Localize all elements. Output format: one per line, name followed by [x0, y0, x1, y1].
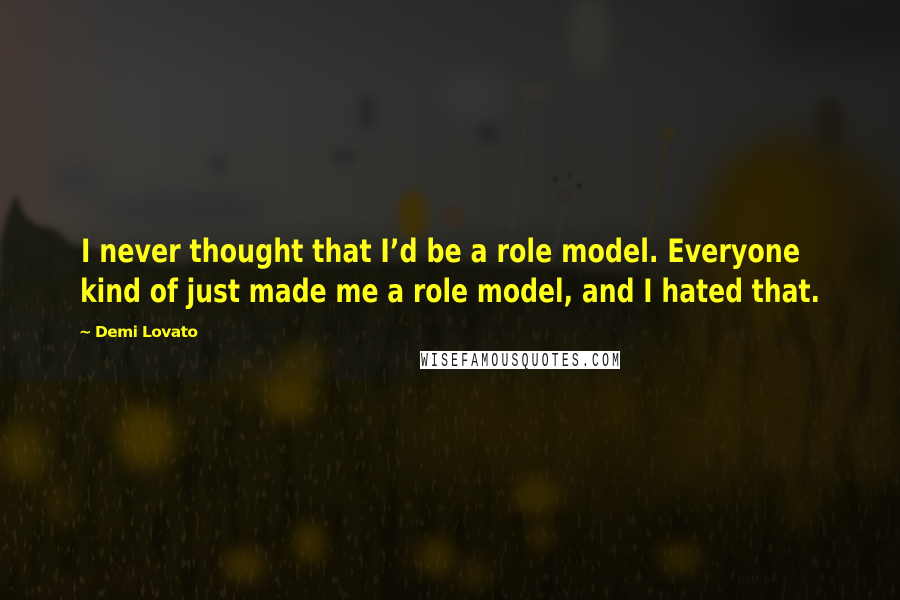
- blurred yellow flowers, field: [1, 340, 822, 591]
- dark tree silhouettes, left and horizon: [0, 194, 640, 380]
- dark vegetation texture: [0, 297, 870, 546]
- author: ~: [79, 323, 92, 341]
- blurred plant stems: [512, 90, 668, 262]
- watermark badge: WISEFAMOUSQUOTES.COM: [421, 350, 619, 372]
- quote text: [79, 232, 820, 341]
- blurred yellow blossom near centre top: [398, 191, 428, 239]
- blurred yellow foliage, right: [680, 97, 900, 480]
- author: Demi Lovato: [95, 323, 198, 341]
- speckled field texture: [0, 281, 898, 600]
- seed heads: [440, 83, 675, 229]
